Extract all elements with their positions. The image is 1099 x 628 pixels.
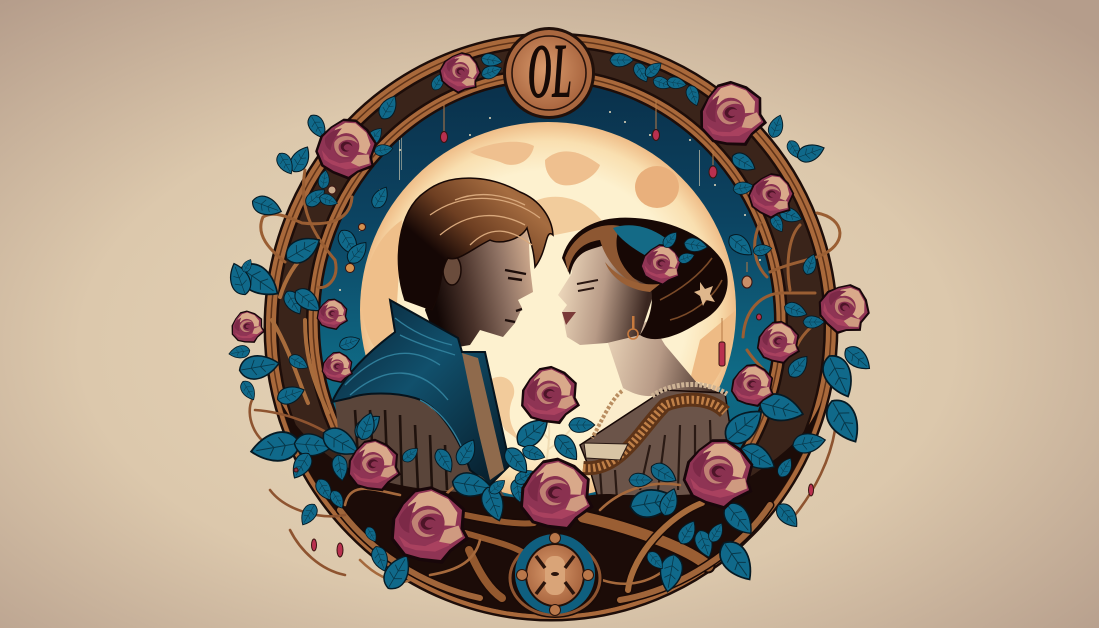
boy ear — [443, 255, 461, 285]
girl dress — [580, 390, 732, 505]
sleeve pleats — [355, 410, 447, 490]
girl earring — [628, 316, 638, 339]
girl hair — [562, 218, 728, 339]
rose: left low — [322, 352, 353, 383]
rose: lower left large — [386, 483, 471, 568]
girl eye lines — [577, 280, 598, 291]
rose: centre single stem — [518, 364, 582, 427]
boy neck and face — [425, 222, 533, 350]
rose: left inner — [317, 299, 348, 330]
boy eye and mouth — [505, 270, 526, 322]
leaves — [225, 52, 875, 594]
dress pleats — [600, 420, 712, 500]
stars — [339, 99, 761, 291]
top medallion: OL — [528, 27, 572, 114]
bottom dark foliage mass — [280, 400, 822, 615]
rose: in hair — [637, 241, 685, 288]
rose: lower right large — [680, 436, 757, 512]
girl lips — [562, 312, 576, 325]
boy sleeve — [335, 392, 510, 505]
hair star ornament — [694, 282, 715, 306]
hair leaves — [660, 229, 708, 265]
dress beading — [583, 400, 725, 468]
rose: top — [434, 46, 487, 99]
boy shirt frill — [462, 353, 504, 480]
night sky disc — [309, 72, 785, 572]
dress ruffle — [652, 384, 727, 396]
dress ruffled bodice — [584, 443, 628, 460]
rose: far left — [228, 308, 267, 347]
girl neck and chest — [590, 320, 725, 450]
rose: far right — [809, 274, 879, 344]
side vines — [261, 170, 840, 413]
rose: lower left small — [345, 437, 402, 494]
shoulder ruffle — [592, 391, 622, 438]
wreath ring — [261, 40, 840, 614]
moon — [360, 122, 736, 498]
roses — [228, 46, 879, 568]
boy — [332, 178, 553, 505]
hanging jewels — [294, 100, 814, 557]
girl hair bun strands — [660, 258, 722, 320]
stem of centre rose — [540, 420, 572, 470]
girl face — [558, 230, 655, 345]
vest ribbing — [345, 318, 465, 455]
girl brown hair sections — [565, 225, 650, 290]
girl chest highlight — [592, 388, 665, 440]
rose: upper right large — [693, 76, 770, 153]
girl — [558, 218, 732, 505]
boy vest and collar — [332, 300, 510, 485]
boy hair strands — [430, 195, 540, 245]
dress lace band — [583, 400, 725, 468]
rose: right upper small — [744, 168, 799, 223]
rose: right lower small — [731, 364, 774, 407]
bottom vines — [250, 400, 835, 600]
top medallion — [503, 27, 595, 119]
boy hair — [398, 178, 553, 310]
girl blue hair streak — [613, 225, 668, 258]
rose: upper left — [311, 114, 382, 184]
bottom medallion — [507, 532, 603, 618]
rose: right inner — [757, 321, 800, 364]
rose: bottom centre — [516, 455, 596, 534]
girl lower hair section — [605, 262, 660, 292]
